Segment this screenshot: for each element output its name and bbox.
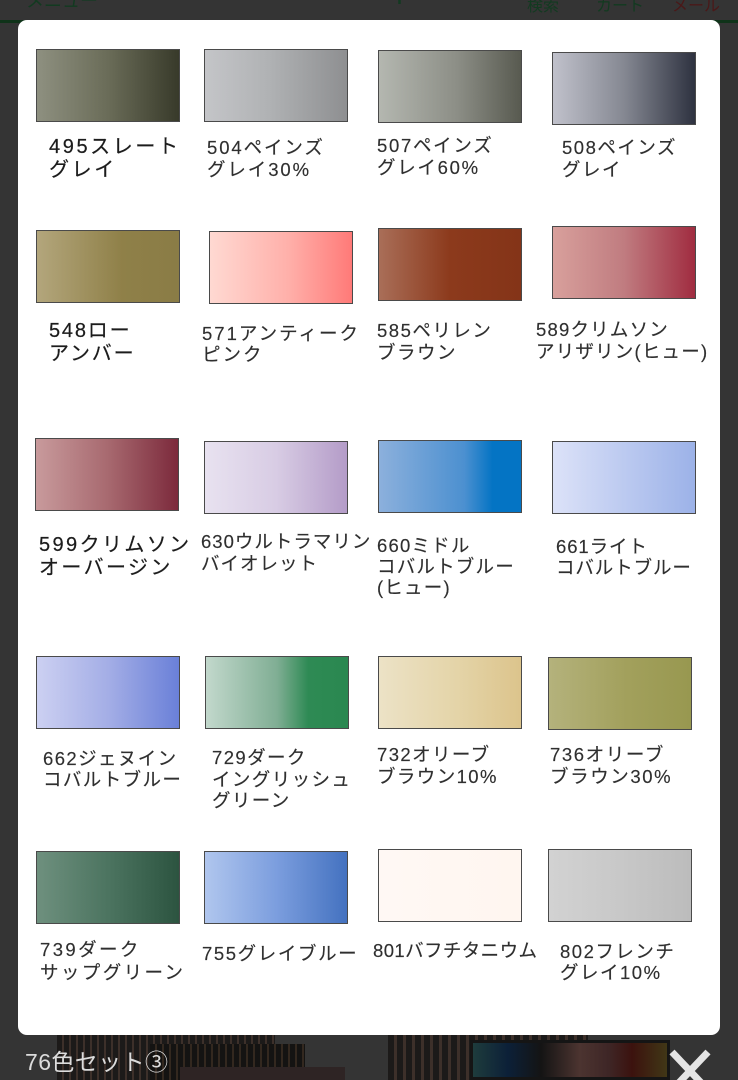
swatch: 630 <box>204 441 348 514</box>
label: 589: 589クリムソン アリザリン(ヒュー) <box>536 319 708 362</box>
icon: close <box>670 1050 710 1080</box>
swatch: 495 <box>36 49 180 122</box>
label: 755: 755グレイブルー <box>202 943 358 964</box>
label: 660: 660ミドル コバルトブルー (ヒュー) <box>377 535 515 598</box>
label: 599: 599クリムソン オーバージン <box>39 534 192 579</box>
label: 585: 585ペリレン ブラウン <box>377 320 492 362</box>
swatch: 504 <box>204 49 348 122</box>
swatch: 802 <box>548 849 692 922</box>
label: 508: 508ペインズ グレイ <box>562 137 677 180</box>
swatch: 585 <box>378 228 522 301</box>
swatch: 729 <box>205 656 349 729</box>
swatch: 739 <box>36 851 180 924</box>
swatch: 736 <box>548 657 692 730</box>
label: 548: 548ロー アンバー <box>49 320 135 365</box>
swatch: 661 <box>552 441 696 514</box>
swatch: 801 <box>378 849 522 922</box>
label: 662: 662ジェヌイン コバルトブルー <box>43 748 182 790</box>
swatch: 660 <box>378 440 522 513</box>
swatch: 571 <box>209 231 353 304</box>
top navigation bar <box>0 0 738 23</box>
label: 801: 801バフチタニウム <box>373 940 537 961</box>
label: 732: 732オリーブ ブラウン10% <box>377 744 498 786</box>
swatch: 548 <box>36 230 180 303</box>
label: 571: 571アンティーク ピンク <box>202 323 360 364</box>
swatch: 589 <box>552 226 696 299</box>
label: 504: 504ペインズ グレイ30% <box>207 137 325 180</box>
label: 729: 729ダーク イングリッシュ グリーン <box>212 747 351 811</box>
label: 802: 802フレンチ グレイ10% <box>560 941 675 983</box>
caption: 76色セット③ <box>25 1049 168 1075</box>
label: 739: 739ダーク サップグリーン <box>40 939 185 982</box>
label: 736: 736オリーブ ブラウン30% <box>550 744 672 786</box>
swatch: 507 <box>378 50 522 123</box>
label: 661: 661ライト コバルトブルー <box>556 536 692 578</box>
swatch: 732 <box>378 656 522 729</box>
swatch: 755 <box>204 851 348 924</box>
swatch: 508 <box>552 52 696 125</box>
swatch: 662 <box>36 656 180 729</box>
label: 630: 630ウルトラマリン バイオレット <box>201 531 371 574</box>
background photo strip <box>57 1035 670 1080</box>
label: 495: 495スレート グレイ <box>49 136 181 181</box>
swatch: 599 <box>35 438 179 511</box>
label: 507: 507ペインズ グレイ60% <box>377 135 493 178</box>
